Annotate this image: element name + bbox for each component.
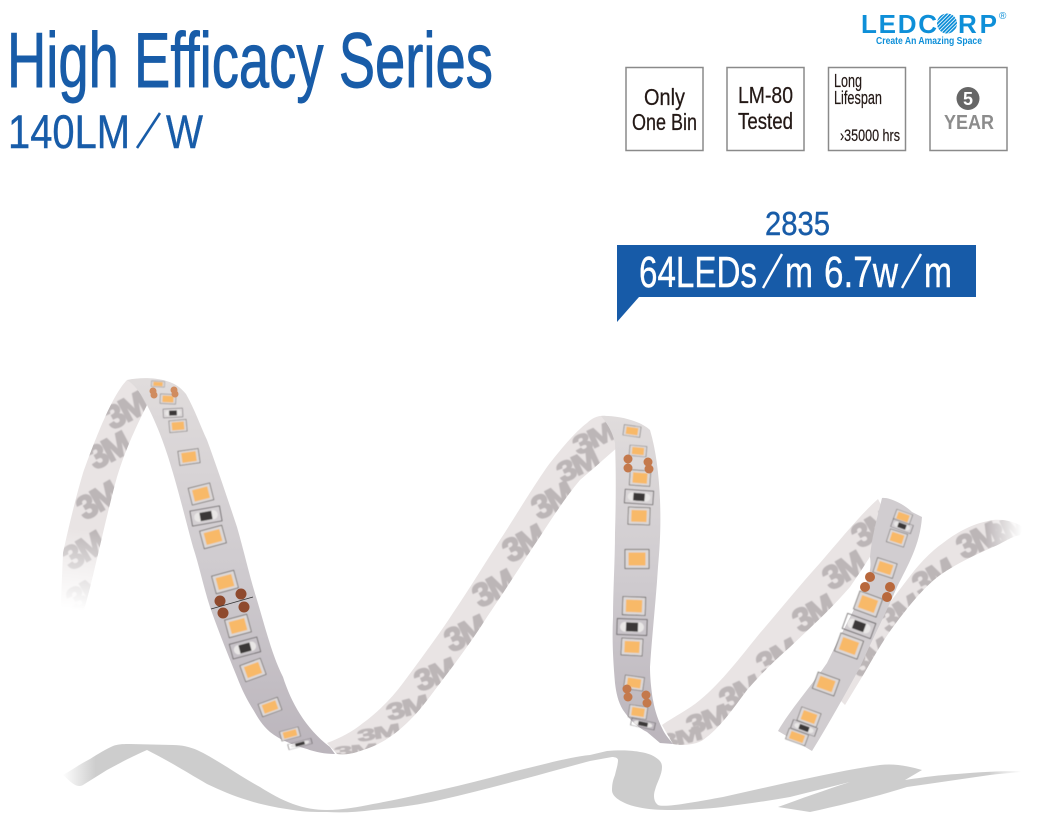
left fade [50,520,130,640]
adhesive band between strips 2 and 3: 3M [816,544,871,597]
strip 1 adhesive back [62,380,147,602]
badge: LM-80 tested: LM-80 [738,82,793,108]
right fade [985,510,1025,555]
floor shadow of strip [63,744,1022,812]
subtitle: W [166,105,204,158]
adhesive band between strips 1 and 2: 3M [409,651,461,698]
subtitle: 140LM [8,105,130,158]
strip 1 adhesive back: 3M [81,424,136,477]
badge: long lifespan: Long [834,71,862,91]
LEDs on strip 3 [785,509,913,746]
spec banner: m [785,248,813,297]
adhesive band between strips 2 and 3: 3M [713,668,767,719]
spec banner: m [924,248,952,297]
title: High Efficacy Series [7,16,493,104]
adhesive band right of strip 3: 3M [950,515,1004,566]
spec banner: 6.7w [824,248,898,297]
solder pads on strip 3 [860,572,895,602]
adhesive band between strips 1 and 2 [327,416,619,759]
LED strip 3 front [778,498,922,751]
brand logo: Create An Amazing Space [876,36,982,47]
badge: long lifespan [828,68,906,150]
LED strip 2 front [601,416,673,744]
adhesive band between strips 2 and 3 [662,499,880,745]
badge: long lifespan: ›35000 hrs [840,126,900,145]
strip 1 adhesive back: 3M [56,524,111,577]
icon: striped logo circle [937,14,957,34]
badge: only one bin: Only [644,84,685,110]
LED strip 1 front [127,378,335,754]
adhesive band between strips 1 and 2: 3M [438,608,492,659]
brand logo [861,9,1007,47]
spec banner [617,245,976,322]
strip 1 adhesive back: 3M [70,474,125,527]
adhesive band between strips 1 and 2: 3M [334,741,377,759]
brand logo: RP [958,9,997,39]
strip 1 adhesive back: 3M [60,566,115,619]
adhesive band between strips 1 and 2: 3M [496,517,551,570]
adhesive band between strips 2 and 3: 3M [657,721,703,754]
model number: 2835 [765,205,830,242]
adhesive band right of strip 3 [841,520,1018,705]
badge: LM-80 tested [727,68,804,150]
adhesive band between strips 1 and 2: 3M [466,562,521,615]
brand logo: ® [999,11,1007,22]
adhesive band right of strip 3: 3M [980,505,1034,556]
adhesive band between strips 1 and 2: 3M [384,690,431,726]
adhesive band between strips 1 and 2: 3M [356,720,400,746]
pads at strip 1 top [150,386,178,398]
spec banner: 64LEDs [639,248,757,297]
LEDs on strip 1 [151,381,312,750]
solder pads on strip 2 [622,454,654,708]
strip 1 adhesive back: 3M [98,384,153,437]
adhesive band right of strip 3: 3M [843,630,898,684]
LEDs on strip 2 [617,425,655,730]
adhesive band between strips 2 and 3: 3M [845,502,900,555]
badge: 5 year warranty: 5 [963,89,973,109]
badge: only one bin [626,68,703,150]
adhesive band between strips 2 and 3: 3M [750,631,805,684]
badge: 5 year warranty [930,68,1007,150]
brand logo: LEDC [861,9,937,39]
adhesive band right of strip 3: 3M [906,551,961,604]
badge: only one bin: One Bin [632,109,697,135]
adhesive band between strips 1 and 2: 3M [568,417,619,461]
adhesive band between strips 1 and 2: 3M [552,443,603,489]
title [7,16,493,158]
adhesive band between strips 2 and 3: 3M [786,587,841,640]
badge: long lifespan: Lifespan [834,88,882,108]
badge: 5 year warranty: YEAR [944,112,994,134]
badge: LM-80 tested: Tested [738,108,793,134]
adhesive band right of strip 3: 3M [873,587,928,640]
adhesive band between strips 2 and 3: 3M [682,700,732,741]
solder pads on strip 1 [211,588,253,618]
adhesive band between strips 1 and 2: 3M [525,474,580,527]
